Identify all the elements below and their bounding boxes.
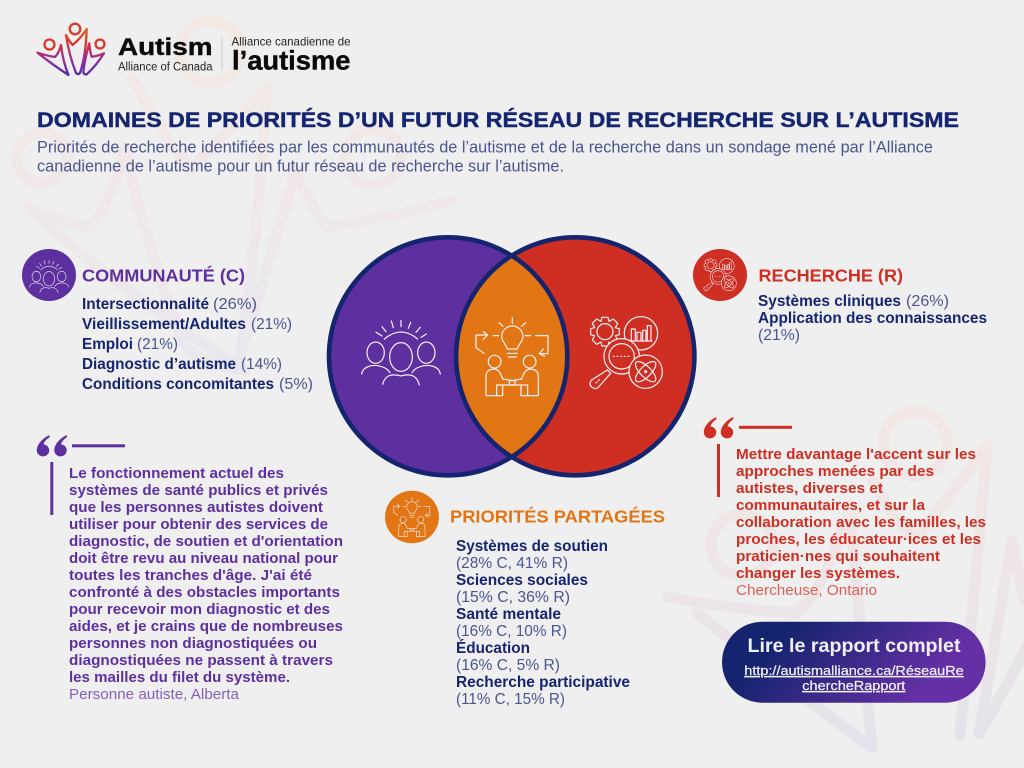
- list: communauté priorities: Intersectionnalité: [82, 296, 209, 313]
- list: shared priorities: Santé mentale: [456, 606, 561, 623]
- icon: quotation mark: [704, 417, 792, 497]
- venn diagram: [329, 237, 694, 475]
- text: quote body: diagnostic, de soutien et d'orientation: [69, 534, 343, 550]
- icon: priorités partagées badge: [385, 491, 439, 543]
- subtitle: canadienne de l’autisme pour un futur réseau de recherche sur l’autisme.: [37, 156, 564, 176]
- list: recherche priorities: [758, 293, 987, 344]
- text: quote body: personnes non diagnostiquées ou: [69, 636, 317, 652]
- lens: priorités partagées: [456, 256, 567, 457]
- list: communauté priorities: Conditions concomitantes: [82, 376, 274, 393]
- watermark: logo top left: [17, 21, 453, 370]
- heading: priorités partagées: PRIORITÉS PARTAGÉES: [450, 507, 665, 527]
- button link: [744, 663, 964, 693]
- list: shared priorities: (11% C, 15% R): [456, 691, 565, 708]
- text: quote body: les mailles du filet du système.: [69, 670, 290, 686]
- text: quote body: que les personnes autistes doivent: [69, 500, 323, 516]
- list: shared priorities: Recherche participative: [456, 674, 630, 691]
- list: recherche priorities: (21%): [758, 327, 800, 344]
- icon: people: [362, 320, 440, 385]
- list: communauté priorities: Emploi: [82, 336, 133, 353]
- icon: quotation mark: [37, 435, 125, 515]
- text: quote body: autistes, diverses et: [736, 481, 883, 497]
- quote: chercheuse: [704, 417, 986, 599]
- icon: recherche badge: [693, 249, 747, 301]
- list: shared priorities: (16% C, 5% R): [456, 657, 560, 674]
- list: communauté priorities: (21%): [137, 336, 178, 353]
- text: quote body: pour recevoir mon diagnostic et des: [69, 602, 330, 618]
- title: DOMAINES DE PRIORITÉS D’UN FUTUR RÉSEAU DE RECHERCHE SUR L’AUTISME: [37, 107, 959, 132]
- button: read full report: [722, 622, 986, 703]
- subtitle: Priorités de recherche identifiées par les communautés de l’autisme et de la recherche dans un sondage mené par l’Alliance: [37, 138, 933, 156]
- list: recherche priorities: (26%): [906, 293, 949, 310]
- watermark: logo bottom right: [668, 412, 1024, 748]
- icon: communauté badge: [22, 249, 76, 301]
- subtitle: [37, 138, 933, 176]
- panel: recherche: [693, 249, 987, 344]
- button link: chercheRapport: [802, 678, 906, 693]
- text: quote attribution: Chercheuse, Ontario: [736, 583, 877, 599]
- text: quote body: aides, et je crains que de nombreuses: [69, 619, 343, 635]
- text: quote body: systèmes de santé publics et privés: [69, 483, 328, 499]
- heading: recherche: RECHERCHE (R): [758, 266, 903, 286]
- list: communauté priorities: (26%): [213, 296, 257, 313]
- text: quote body: approches menées par des: [736, 464, 934, 480]
- logo French line: Alliance canadienne de: [232, 35, 351, 49]
- list: communauté priorities: Vieillissement/Adultes: [82, 316, 246, 333]
- text: quote body: [736, 447, 986, 582]
- text: quote body: changer les systèmes.: [736, 566, 900, 582]
- button heading: Lire le rapport complet: [748, 636, 961, 657]
- text: quote body: toutes les tranches d'âge. J'ai été: [69, 568, 312, 584]
- text: quote body: utiliser pour obtenir des services de: [69, 517, 328, 533]
- text: quote body: communautaires, et sur la: [736, 498, 926, 514]
- text: quote body: [69, 466, 343, 686]
- list: shared priorities: Systèmes de soutien: [456, 538, 608, 555]
- logo: [38, 24, 351, 75]
- list: communauté priorities: (21%): [251, 316, 292, 333]
- logo subtitle: Alliance of Canada: [118, 62, 213, 74]
- icon: lightbulb and collaboration: [476, 318, 548, 396]
- icon: logo mark: [38, 24, 104, 75]
- list: communauté priorities: Diagnostic d’autisme: [82, 356, 236, 373]
- text: quote body: proches, les éducateur·ices et les: [736, 532, 981, 548]
- list: communauté priorities: [82, 296, 313, 393]
- list: shared priorities: (16% C, 10% R): [456, 623, 567, 640]
- text: quote body: Le fonctionnement actuel des: [69, 466, 284, 482]
- text: quote body: doit être revu au niveau national pour: [69, 551, 338, 567]
- circle: recherche: [456, 237, 694, 475]
- logo wordmark: l'autisme: l’autisme: [232, 45, 350, 75]
- text: quote body: Mettre davantage l'accent sur les: [736, 447, 976, 463]
- circle: communauté: [329, 237, 567, 475]
- text: quote attribution: Personne autiste, Alberta: [69, 687, 240, 703]
- list: shared priorities: Sciences sociales: [456, 572, 588, 589]
- list: shared priorities: (15% C, 36% R): [456, 589, 570, 606]
- list: shared priorities: [456, 538, 630, 708]
- text: quote body: confronté à des obstacles importants: [69, 585, 340, 601]
- panel: priorités partagées: [385, 491, 665, 708]
- heading: communauté: COMMUNAUTÉ (C): [82, 266, 245, 286]
- icon: research magnifier: [590, 317, 662, 389]
- text: quote body: collaboration avec les familles, les: [736, 515, 986, 531]
- list: shared priorities: (28% C, 41% R): [456, 555, 568, 572]
- button link: http://autismalliance.ca/RéseauRe: [744, 663, 964, 678]
- list: shared priorities: Éducation: [456, 640, 530, 657]
- text: quote body: diagnostiquées ne passent à travers: [69, 653, 333, 669]
- logo wordmark: Autism: Autism: [118, 34, 212, 61]
- quote: personne autiste: [37, 435, 343, 703]
- list: recherche priorities: Systèmes cliniques: [758, 293, 901, 310]
- text: quote body: praticien·nes qui souhaitent: [736, 549, 940, 565]
- panel: communauté: [22, 249, 313, 393]
- list: communauté priorities: (14%): [241, 356, 282, 373]
- list: communauté priorities: (5%): [279, 376, 313, 393]
- list: recherche priorities: Application des connaissances: [758, 310, 987, 327]
